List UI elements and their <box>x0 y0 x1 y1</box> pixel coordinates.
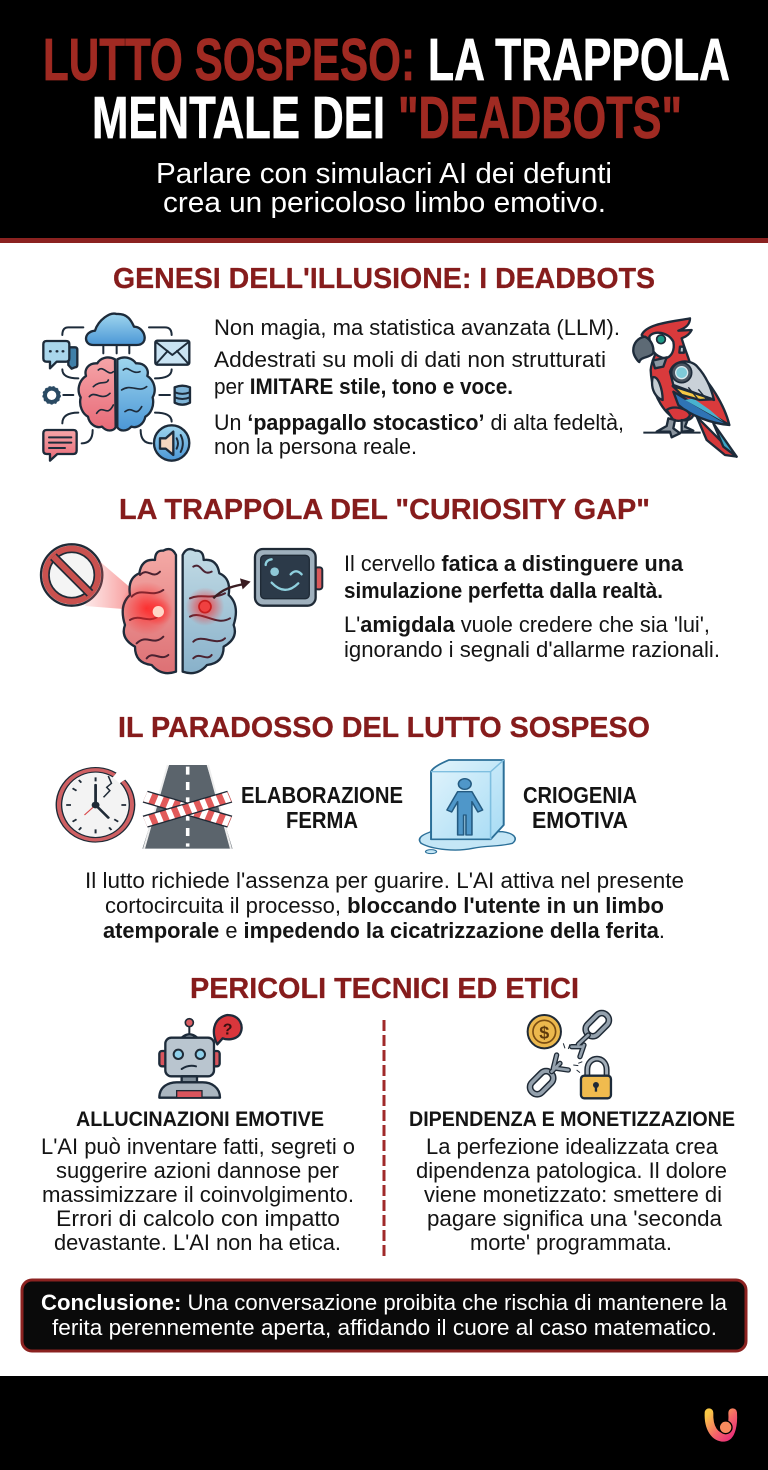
heading: genesi: GENESI DELL'ILLUSIONE: I DEADBOTS <box>113 263 655 295</box>
text: genesi: non la persona reale. <box>214 434 417 459</box>
icon: coin, broken chain and padlock <box>527 1010 612 1098</box>
icon: confused robot <box>159 1015 242 1098</box>
icon: brain with amygdala and smiling device <box>41 544 322 673</box>
text: dipendenza: dipendenza patologica. Il dolore <box>416 1158 727 1183</box>
subheading: dipendenza: DIPENDENZA E MONETIZZAZIONE <box>409 1108 735 1131</box>
label: elaborazione ferma: ELABORAZIONE <box>241 782 403 808</box>
callout: conclusione: ferita perennemente aperta, affidando il cuore al caso matematico. <box>52 1315 717 1340</box>
footer band <box>0 1376 768 1470</box>
text: genesi: Un ‘pappagallo stocastico’ di alta fedeltà, <box>214 410 624 435</box>
icon: broken clock <box>59 770 132 840</box>
heading: curiosity gap: LA TRAPPOLA DEL "CURIOSITY GAP" <box>119 494 650 526</box>
subtitle: crea un pericoloso limbo emotivo. <box>163 187 606 219</box>
text: allucinazioni: Errori di calcolo con impatto <box>56 1206 340 1231</box>
text: curiosity gap: ignorando i segnali d'allarme razionali. <box>344 637 720 662</box>
icon: person frozen in ice <box>419 760 515 854</box>
icon: coin, broken chain and padlock: $ <box>539 1022 549 1042</box>
text: allucinazioni: L'AI può inventare fatti, segreti o <box>41 1134 355 1159</box>
divider: dashed vertical line <box>382 1020 386 1256</box>
title: LUTTO SOSPESO: <box>43 27 415 93</box>
text: curiosity gap: Il cervello fatica a distinguere una <box>344 551 683 576</box>
icon: logo <box>709 1413 733 1437</box>
subtitle <box>156 158 612 219</box>
text: allucinazioni: suggerire azioni dannose per <box>56 1158 339 1183</box>
title <box>43 27 730 151</box>
text: curiosity gap: L'amigdala vuole credere che sia 'lui', <box>344 612 710 637</box>
header panel <box>0 0 768 243</box>
label: criogenia emotiva: EMOTIVA <box>532 807 628 833</box>
text: genesi <box>214 315 624 459</box>
label: criogenia emotiva <box>523 782 637 833</box>
text: allucinazioni: devastante. L'AI non ha etica. <box>54 1230 341 1255</box>
text: genesi: per IMITARE stile, tono e voce. <box>214 374 513 399</box>
subheading: allucinazioni: ALLUCINAZIONI EMOTIVE <box>76 1108 324 1131</box>
text: paradosso: atemporale e impedendo la cicatrizzazione della ferita. <box>103 918 665 943</box>
label: criogenia emotiva: CRIOGENIA <box>523 782 637 808</box>
text: dipendenza: morte' programmata. <box>470 1230 672 1255</box>
heading: paradosso: IL PARADOSSO DEL LUTTO SOSPESO <box>118 712 650 744</box>
icon: road with barrier <box>142 765 233 849</box>
text: curiosity gap: simulazione perfetta dalla realtà. <box>344 578 663 603</box>
text: paradosso: Il lutto richiede l'assenza per guarire. L'AI attiva nel presente <box>85 868 684 893</box>
text: genesi: Non magia, ma statistica avanzata (LLM). <box>214 315 620 340</box>
icon: brain network <box>43 314 190 461</box>
column: allucinazioni emotive <box>41 1015 355 1255</box>
heading: pericoli: PERICOLI TECNICI ED ETICI <box>190 973 579 1005</box>
subtitle: Parlare con simulacri AI dei defunti <box>156 158 612 190</box>
callout: conclusione: Conclusione: Una conversazione proibita che rischia di mantenere la <box>41 1290 727 1315</box>
text: genesi: Addestrati su moli di dati non strutturati <box>214 347 606 372</box>
title: MENTALE DEI <box>92 85 385 151</box>
panel: curiosity gap <box>41 494 720 673</box>
panel: paradosso del lutto sospeso <box>59 712 684 943</box>
callout: conclusione <box>22 1280 746 1351</box>
text: curiosity gap <box>344 551 720 662</box>
icon: robotic parrot <box>633 318 737 457</box>
label: elaborazione ferma: FERMA <box>286 807 358 833</box>
text: dipendenza: viene monetizzato: smettere di <box>424 1182 722 1207</box>
column: dipendenza e monetizzazione <box>409 1010 735 1255</box>
icon: confused robot: ? <box>223 1021 233 1038</box>
text: dipendenza: La perfezione idealizzata crea <box>426 1134 718 1159</box>
panel: genesi dell'illusione <box>43 263 737 461</box>
text: allucinazioni <box>41 1134 355 1255</box>
label: elaborazione ferma <box>241 782 403 833</box>
text: paradosso <box>85 868 684 943</box>
text: dipendenza: pagare significa una 'seconda <box>427 1206 722 1231</box>
text: dipendenza <box>416 1134 727 1255</box>
text: allucinazioni: massimizzare il coinvolgimento. <box>42 1182 354 1207</box>
text: paradosso: cortocircuita il processo, bloccando l'utente in un limbo <box>105 893 664 918</box>
panel: pericoli tecnici ed etici <box>41 973 735 1256</box>
